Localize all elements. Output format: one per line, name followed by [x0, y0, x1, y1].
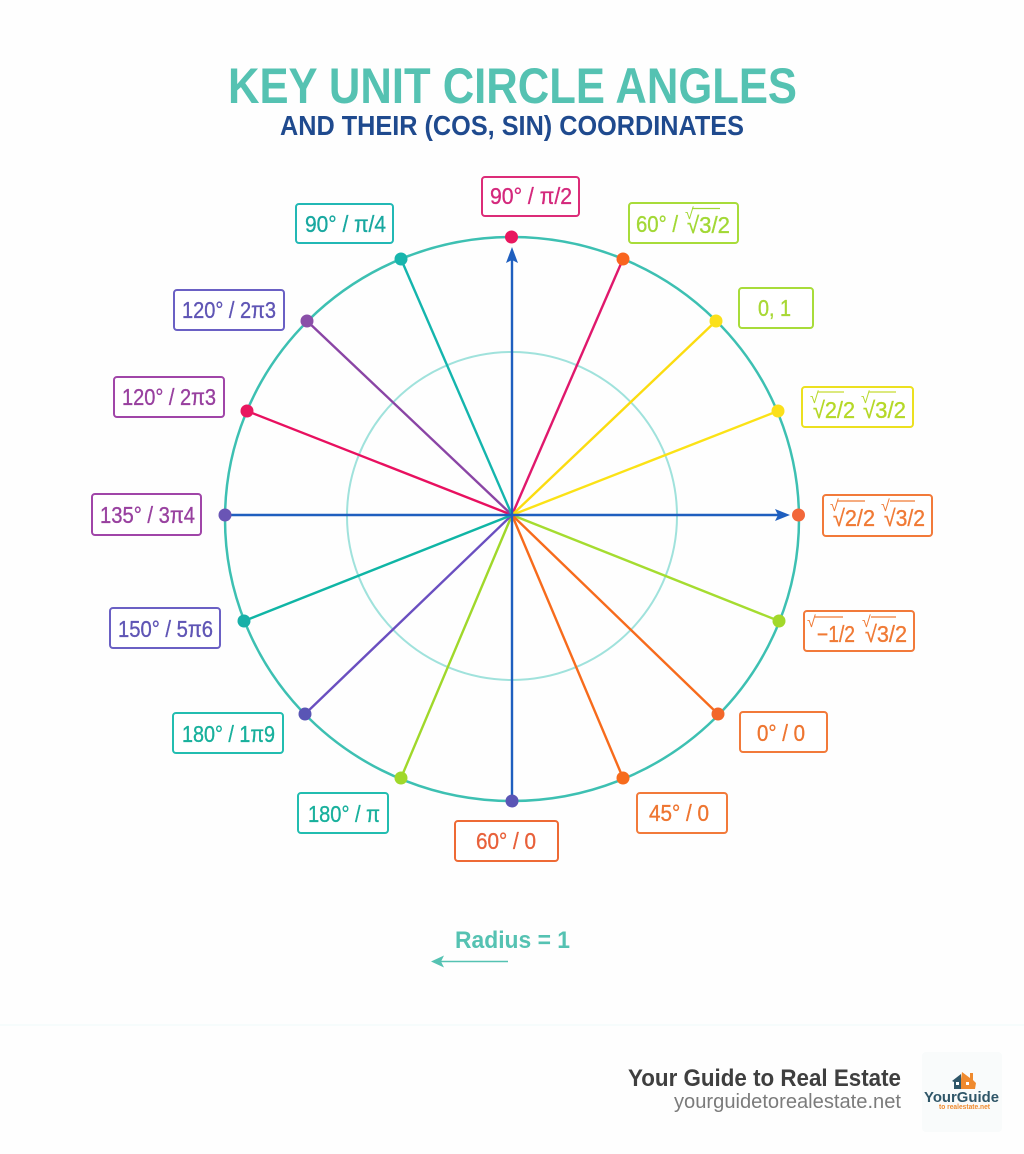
subtitle: AND THEIR (COS, SIN) COORDINATES: [280, 110, 744, 141]
radius arrow: [431, 956, 508, 968]
label: 60° / 0: [455, 821, 558, 861]
radial lines: [244, 259, 779, 778]
title: KEY UNIT CIRCLE ANGLES: [228, 58, 797, 114]
label: −1/2 √3/2: √: [862, 614, 871, 631]
label: 90° / π/4: [296, 204, 393, 243]
label: 60° / 0: 60° / 0: [476, 828, 536, 854]
label: 90° / π/2: 90° / π/2: [490, 183, 572, 209]
label: √2/2 √3/2 yellow: √3/2: [863, 397, 906, 423]
logo tagline: to realestate.net: [939, 1104, 991, 1111]
label: −1/2 √3/2: −1/2: [817, 621, 855, 647]
footer: [0, 1025, 1024, 1132]
label: 0, 1: 0, 1: [758, 295, 791, 321]
footer brand name: Your Guide to Real Estate: [628, 1065, 901, 1092]
logo wordmark: YourGuide: [924, 1089, 999, 1106]
label: −1/2 √3/2: [804, 611, 914, 651]
label: 60° / √3/2: 60° /: [636, 211, 679, 237]
label: 150° / 5π6: 150° / 5π6: [118, 616, 213, 642]
outer circle: [225, 237, 799, 801]
label: 60° / √3/2: √3/2: [687, 212, 730, 238]
label: 150° / 5π6: [110, 608, 220, 648]
label: 120° / 2π3 purple: 120° / 2π3: [122, 384, 216, 410]
label: √2/2 √3/2 yellow: √2/2: [813, 397, 855, 423]
radius label: Radius = 1: [455, 927, 570, 954]
label: 120° / 2π3 indigo: [174, 290, 284, 330]
label: −1/2 √3/2: √: [807, 614, 816, 631]
label: 90° / π/2: [482, 177, 579, 216]
logo: [922, 1052, 1002, 1132]
label: √2/2 √3/2 orange: √2/2: [833, 505, 875, 531]
inner circle: [347, 352, 677, 680]
label: 180° / 1π9: 180° / 1π9: [182, 721, 275, 747]
label: 60° / √3/2: [629, 203, 738, 243]
label: 135° / 3π4: [92, 494, 201, 535]
label: −1/2 √3/2: √3/2: [865, 621, 907, 647]
label: √2/2 √3/2 orange: √: [830, 498, 839, 515]
label: √2/2 √3/2 yellow: √: [861, 390, 870, 407]
axes with arrows: [225, 247, 790, 801]
label: 180° / π: [298, 793, 388, 833]
label: 180° / 1π9: [173, 713, 283, 753]
label: 0° / 0: 0° / 0: [757, 720, 805, 746]
label: 0° / 0: [740, 712, 827, 752]
footer divider: [0, 1024, 1024, 1026]
icon: house: [952, 1072, 976, 1089]
label: 0, 1: [739, 288, 813, 328]
label: √2/2 √3/2 orange: [823, 495, 932, 536]
label: 180° / π: 180° / π: [308, 801, 380, 827]
label: 90° / π/4: 90° / π/4: [305, 211, 386, 237]
label: 45° / 0: [637, 793, 727, 833]
label: 60° / √3/2: √: [685, 206, 694, 223]
unit circle diagram: [218, 230, 805, 808]
footer url: yourguidetorealestate.net: [674, 1091, 901, 1113]
label: √2/2 √3/2 orange: √3/2: [884, 505, 925, 531]
label: √2/2 √3/2 orange: √: [881, 498, 890, 515]
label: 45° / 0: 45° / 0: [649, 800, 709, 826]
label: 120° / 2π3 purple: [114, 377, 224, 417]
label: 120° / 2π3 indigo: 120° / 2π3: [182, 297, 276, 323]
label: √2/2 √3/2 yellow: [802, 387, 913, 427]
label: 135° / 3π4: 135° / 3π4: [100, 502, 195, 528]
label: √2/2 √3/2 yellow: √: [810, 390, 819, 407]
points on the circle: [218, 230, 805, 808]
